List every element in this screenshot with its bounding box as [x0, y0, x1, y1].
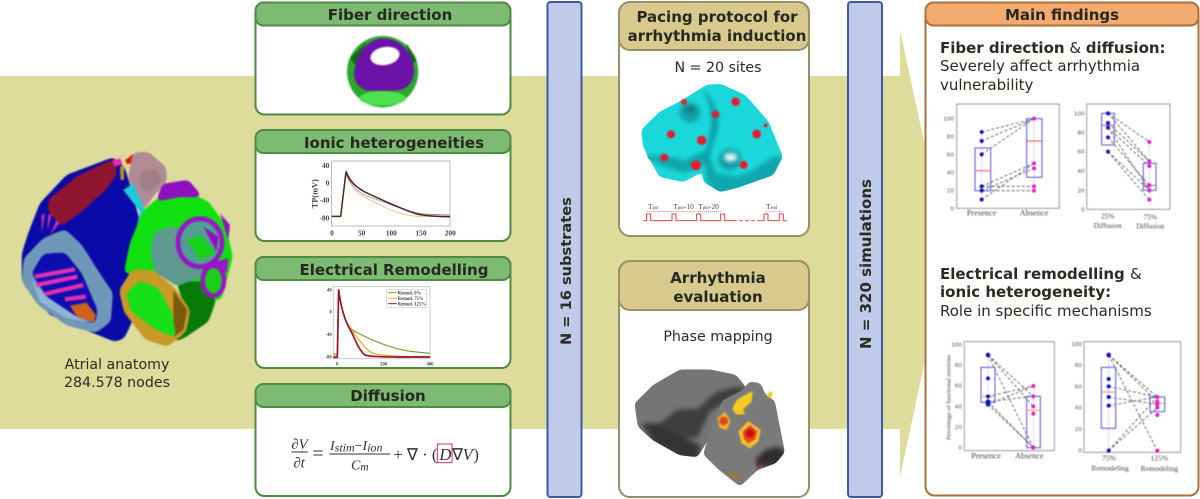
line chart: remodelling action potentials: Remod. 125%	[398, 302, 426, 307]
box plot: diffusion: Diffusion	[1136, 222, 1165, 231]
background arrow band	[0, 30, 948, 477]
chart: pacing pulse train: Tpur	[648, 202, 659, 211]
heading: pacing protocol: arrhythmia induction	[628, 27, 806, 45]
box plot: functional reentries: 20	[955, 425, 962, 431]
box plot: remodeling: 75%	[1102, 453, 1117, 462]
icon: phase map atria	[635, 370, 785, 486]
line chart: ionic action potentials	[311, 161, 456, 237]
box plot: functional reentries: 80	[955, 363, 962, 369]
chart: pacing pulse train	[643, 202, 787, 221]
panel: main findings	[926, 2, 1198, 496]
icon: fiber direction sphere	[347, 36, 418, 107]
panel: fiber direction	[256, 2, 510, 114]
equation: monodomain diffusion: + ∇ · (	[393, 445, 438, 464]
line chart: ionic action potentials: 50	[358, 228, 366, 237]
line chart: ionic action potentials: 200	[445, 228, 456, 237]
heading: pacing protocol	[628, 8, 806, 45]
line chart: ionic action potentials: TP(mV)	[311, 179, 320, 208]
heading: arrhythmia evaluation: Arrhythmia	[670, 269, 766, 287]
heading: arrhythmia evaluation: evaluation	[673, 288, 763, 306]
line chart: ionic action potentials: -40	[320, 195, 330, 204]
panel: arrhythmia evaluation	[619, 261, 809, 497]
box plot: diffusion: 25%	[1101, 212, 1114, 221]
chart: pacing pulse train: Tpur-20	[698, 202, 719, 211]
line chart: remodelling action potentials: Remod. 0%	[398, 291, 422, 296]
equation: monodomain diffusion	[291, 437, 479, 474]
text: atrial anatomy caption: 284.578 nodes	[64, 375, 170, 391]
text: remodelling finding: ionic heterogeneity:	[940, 283, 1111, 301]
equation: monodomain diffusion: ∂t	[293, 456, 306, 472]
text: remodelling finding	[940, 265, 1152, 320]
equation: monodomain diffusion: I	[363, 439, 367, 454]
panel: pacing protocol	[619, 2, 809, 236]
box plot: diffusion	[1074, 104, 1170, 231]
panel: ionic heterogeneities	[256, 130, 510, 241]
equation: monodomain diffusion: V	[463, 445, 475, 464]
bar: N = 320 simulations	[848, 2, 882, 497]
box plot: remodeling: Remodeling	[1091, 463, 1129, 472]
bar: N = 16 substrates: N = 16 substrates	[558, 197, 575, 345]
panel: electrical remodelling	[256, 257, 510, 368]
text: phase mapping: Phase mapping	[663, 329, 773, 345]
bar: N = 320 simulations: N = 320 simulations	[857, 179, 875, 349]
bar: N = 16 substrates	[548, 2, 582, 497]
chart: pacing pulse train: Tpur-10	[673, 202, 694, 211]
box plot: diffusion: 100	[1074, 111, 1085, 117]
box plot: presence vs absence: Absence	[1020, 209, 1049, 218]
text: remodelling finding: Role in specific mechanisms	[940, 302, 1152, 320]
box plot: presence vs absence: 20	[947, 189, 954, 195]
box plot: remodeling: 60	[1075, 384, 1082, 390]
equation: monodomain diffusion: ∇	[451, 445, 464, 464]
text: number of sites: N = 20 sites	[674, 60, 762, 76]
box plot: functional reentries	[945, 342, 1054, 461]
text: remodelling finding: Electrical remodelling &	[940, 265, 1142, 283]
icon: atrial mesh with pacing sites	[641, 84, 783, 192]
heading: diffusion: Diffusion	[350, 387, 426, 405]
line chart: ionic action potentials: 100	[386, 228, 397, 237]
chart: pacing pulse train: Tend	[766, 202, 778, 211]
box plot: functional reentries: 40	[955, 404, 962, 410]
box plot: remodeling: 100	[1071, 342, 1082, 348]
line chart: remodelling action potentials: -80	[325, 355, 332, 360]
box plot: remodeling: Remodeling	[1141, 464, 1178, 473]
text: fiber direction finding: vulnerability	[940, 76, 1034, 94]
heading: fiber direction: Fiber direction	[328, 6, 452, 24]
heading: ionic heterogeneities: Ionic heterogeneities	[304, 134, 484, 152]
box plot: remodeling: 20	[1075, 427, 1082, 433]
text: fiber direction finding: Fiber direction & diffusion:	[940, 39, 1166, 57]
box plot: presence vs absence: 60	[947, 153, 954, 159]
equation: monodomain diffusion: D	[438, 445, 451, 464]
line chart: remodelling action potentials: 0	[329, 310, 332, 315]
line chart: remodelling action potentials: 400	[427, 363, 434, 368]
box plot: diffusion: Diffusion	[1094, 221, 1122, 230]
box plot: presence vs absence: 80	[947, 135, 954, 141]
heading: arrhythmia evaluation	[670, 269, 766, 306]
heading: main findings: Main findings	[1005, 6, 1119, 24]
box plot: remodeling: 0	[1078, 448, 1082, 454]
box plot: functional reentries: Presence	[971, 452, 1001, 461]
line chart: ionic action potentials: 0	[326, 178, 330, 187]
panel: diffusion	[256, 384, 510, 496]
line chart: remodelling action potentials: 200	[380, 363, 388, 368]
equation: monodomain diffusion: =	[312, 443, 324, 465]
box plot: diffusion: 80	[1077, 130, 1085, 136]
box plot: diffusion: 60	[1077, 150, 1085, 156]
line chart: remodelling action potentials: Remod. 75%	[398, 297, 424, 302]
icon: atrial anatomy model	[22, 152, 233, 347]
box plot: remodeling: 125%	[1150, 453, 1169, 462]
box plot: functional reentries: 60	[955, 384, 962, 390]
box plot: functional reentries: Absence	[1015, 452, 1044, 461]
heading: pacing protocol: Pacing protocol for	[636, 8, 798, 26]
box plot: diffusion: 40	[1077, 169, 1085, 175]
box plot: remodeling: 80	[1075, 363, 1082, 369]
box plot: remodeling: 40	[1075, 406, 1082, 412]
text: atrial anatomy caption	[64, 357, 170, 391]
line chart: remodelling action potentials: 0	[336, 363, 339, 368]
box plot: functional reentries: Percentage of functional reentries	[945, 354, 952, 440]
text: fiber direction finding: Severely affect arrhythmia	[940, 57, 1140, 75]
equation: monodomain diffusion: stim	[335, 440, 355, 454]
box plot: presence vs absence: 0	[950, 206, 954, 212]
equation: monodomain diffusion: I	[330, 439, 335, 454]
box plot: presence vs absence: 100	[943, 117, 954, 123]
line chart: ionic action potentials: -80	[320, 214, 330, 223]
line chart: ionic action potentials: 0	[330, 228, 334, 237]
box plot: diffusion: 75%	[1144, 212, 1157, 221]
box plot: diffusion: 0	[1081, 207, 1085, 213]
line chart: remodelling action potentials: 40	[327, 288, 332, 293]
text: atrial anatomy caption: Atrial anatomy	[65, 357, 169, 373]
line chart: ionic action potentials: 40	[322, 161, 330, 170]
box plot: diffusion: 20	[1077, 188, 1085, 194]
line chart: remodelling action potentials: -40	[325, 333, 332, 338]
box plot: functional reentries: 100	[951, 342, 962, 348]
equation: monodomain diffusion: ion	[367, 440, 383, 454]
equation: monodomain diffusion: ∂V	[291, 437, 310, 453]
box plot: presence vs absence: 40	[947, 171, 954, 177]
equation: monodomain diffusion: m	[360, 462, 369, 474]
equation: monodomain diffusion: )	[473, 445, 479, 464]
line chart: ionic action potentials: 150	[415, 228, 427, 237]
box plot: presence vs absence	[943, 104, 1059, 218]
equation: monodomain diffusion: C	[351, 458, 360, 473]
box plot: functional reentries: 0	[958, 446, 962, 452]
box plot: presence vs absence: Presence	[967, 209, 997, 218]
line chart: remodelling action potentials	[325, 287, 434, 368]
heading: electrical remodelling: Electrical Remodelling	[300, 261, 488, 279]
box plot: remodeling	[1071, 342, 1181, 473]
equation: monodomain diffusion: −	[355, 439, 363, 454]
text: fiber direction finding	[940, 39, 1166, 94]
